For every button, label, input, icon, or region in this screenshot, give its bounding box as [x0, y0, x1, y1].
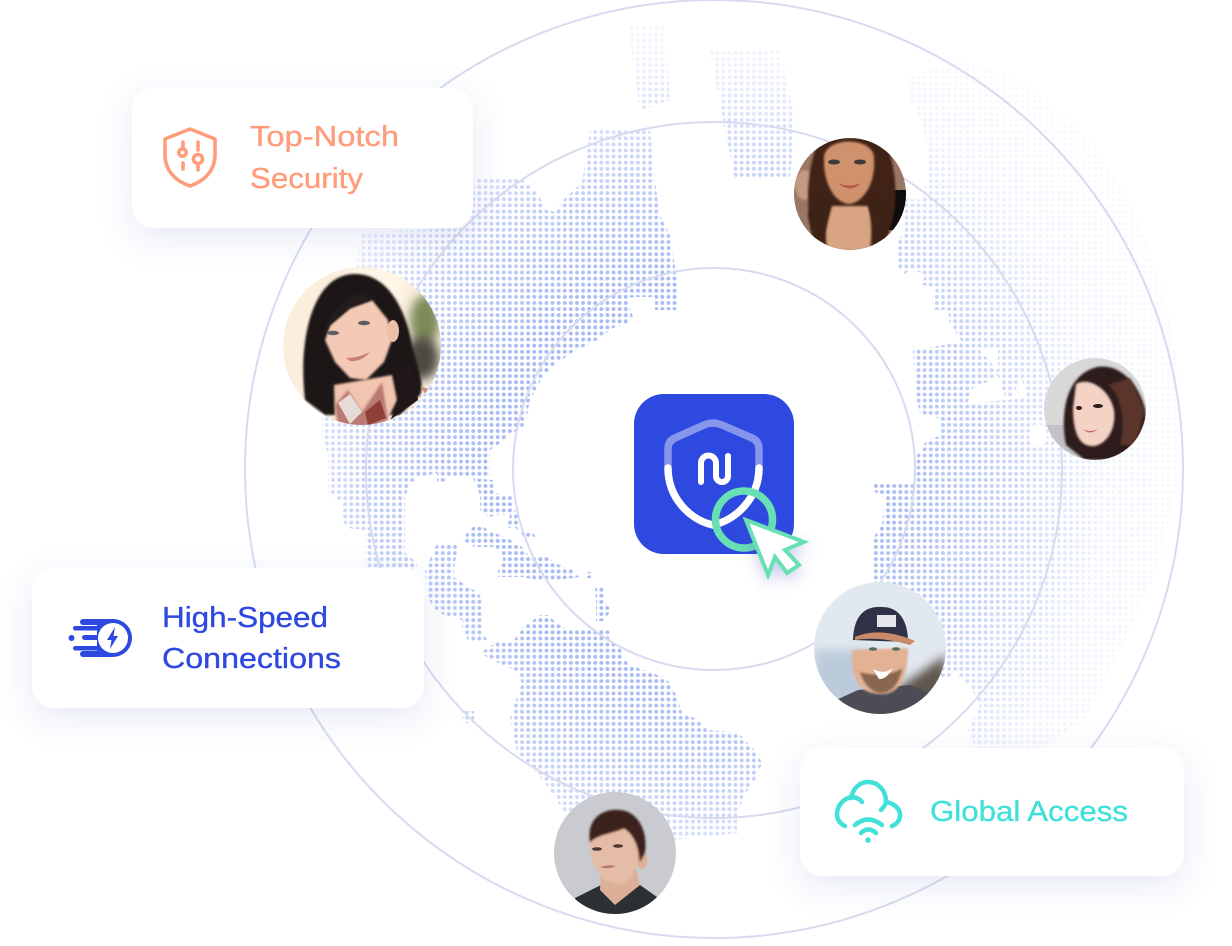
cursor arrow: [746, 520, 804, 575]
center app icon: [634, 394, 804, 575]
card text: Top-Notch: [250, 121, 399, 153]
card: Global Access: [800, 748, 1184, 876]
card text: [162, 602, 341, 675]
icon: shield with sliders: [165, 129, 215, 186]
icon: wifi cloud: [837, 782, 900, 842]
icon: speed bolt: [68, 619, 132, 657]
card text: Global Access: [930, 796, 1128, 828]
photo: young woman on the right: [1044, 358, 1146, 460]
photo: young man at the bottom: [554, 792, 676, 916]
card text: [250, 121, 399, 195]
N mark: [701, 456, 728, 482]
dotted world map: [322, 26, 1158, 840]
app tile: [634, 394, 794, 554]
concentric rings: [245, 0, 1183, 938]
card text: Connections: [162, 643, 341, 675]
card: Top-Notch Security: [132, 88, 473, 228]
photo: man with cap: [814, 582, 946, 716]
card text: High-Speed: [162, 602, 328, 634]
photo: woman with wavy hair: [794, 138, 907, 250]
card: High-Speed Connections: [32, 568, 424, 708]
shield upper: [668, 423, 759, 467]
shield lower: [668, 468, 759, 525]
click ring: [716, 491, 772, 548]
photo: woman with dark hair: [283, 260, 443, 430]
card text: Security: [250, 163, 364, 195]
